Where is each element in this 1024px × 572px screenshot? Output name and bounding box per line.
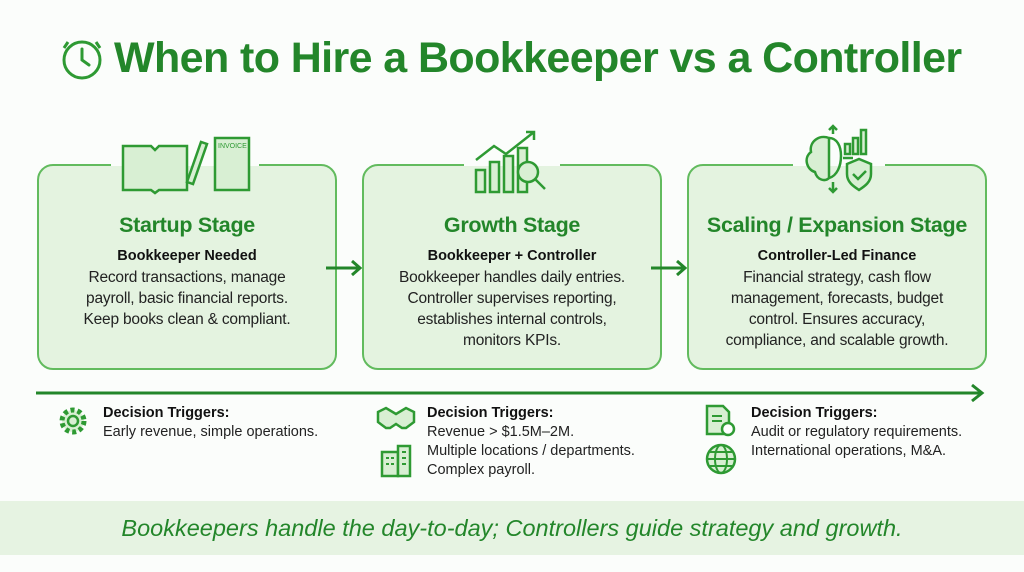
heading: Growth Stage [444,213,580,237]
triggers 1 [60,405,318,440]
panel: startup [37,164,337,370]
text: Complex payroll. [427,462,535,478]
icon: globe [706,444,736,474]
subtitle: Bookkeeper Needed [117,248,257,264]
text: Financial strategy, cash flow [743,269,931,286]
triggers 3 [706,404,962,474]
text [103,405,318,440]
footer band [0,501,1024,555]
icon: building [380,444,412,478]
arrow 1 [326,260,362,276]
panel: scaling [687,164,987,370]
text: payroll, basic financial reports. [86,290,288,307]
subtitle: Bookkeeper + Controller [428,248,596,264]
text: establishes internal controls, [417,311,607,328]
text: Controller supervises reporting, [408,290,616,307]
text [83,269,291,328]
text: management, forecasts, budget [731,290,943,307]
triggers 2 [376,405,635,478]
icon: brain shield [793,124,885,198]
text: monitors KPIs. [463,332,561,349]
text: Decision Triggers: [751,405,878,421]
subtitle: Controller-Led Finance [758,248,916,264]
text [399,269,625,349]
icon: document check [706,404,736,436]
icon: clock [62,40,102,80]
panel: growth [362,164,662,370]
icon: book and invoice [111,132,259,196]
text [726,269,948,349]
text: Record transactions, manage [88,269,286,286]
heading: Startup Stage [119,213,255,237]
text: Revenue > $1.5M–2M. [427,424,574,440]
text: compliance, and scalable growth. [726,332,948,349]
text: Keep books clean & compliant. [83,311,291,328]
text: Audit or regulatory requirements. [751,424,962,440]
text [751,405,962,459]
text: Decision Triggers: [103,405,230,421]
text: Multiple locations / departments. [427,443,635,459]
timeline arrow [36,384,984,402]
icon: book and invoice: INVOICE [218,143,247,150]
arrow 2 [651,260,687,276]
text [427,405,635,478]
text: Bookkeeper handles daily entries. [399,269,625,286]
text: Early revenue, simple operations. [103,424,318,440]
icon: gear [60,408,86,434]
icon: chart [464,126,560,196]
heading: Scaling / Expansion Stage [707,213,967,237]
title: When to Hire a Bookkeeper vs a Controller [114,34,962,82]
text: International operations, M&A. [751,443,946,459]
text: control. Ensures accuracy, [749,311,925,328]
icon: handshake [376,406,416,430]
footer band: Bookkeepers handle the day-to-day; Controllers guide strategy and growth. [121,515,903,541]
text: Decision Triggers: [427,405,554,421]
